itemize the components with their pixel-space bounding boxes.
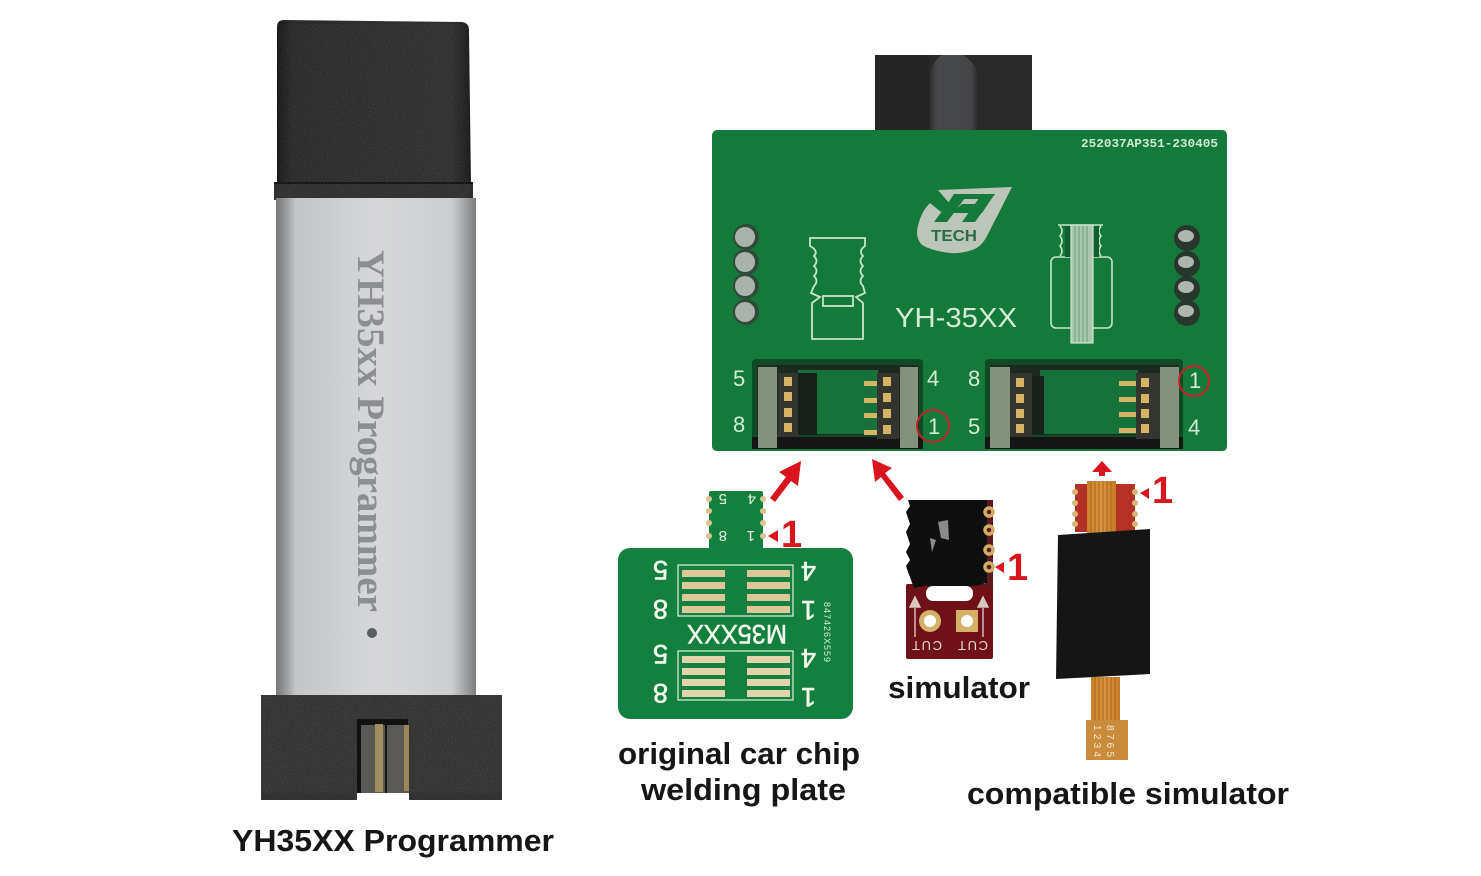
plate pin numbers and part name: 1 <box>801 595 816 625</box>
simulator red board: CUT <box>958 638 988 653</box>
pin 1 callout: welding plate <box>768 514 802 556</box>
flexible cable end pad: 8765 <box>1104 725 1115 757</box>
flexible cable end pad: 1234 <box>1091 725 1102 757</box>
panel: YH35XX programmer device <box>261 20 502 800</box>
simulator red board: CUT <box>912 638 942 653</box>
plate pin numbers and part name <box>653 555 832 712</box>
socket pin numbers: 8 <box>968 366 980 391</box>
plate tab: 5 <box>719 490 727 507</box>
panel: welding plate <box>618 490 853 719</box>
plate tab: 4 <box>748 490 756 507</box>
flexible cable upper <box>1087 481 1116 533</box>
PCB body <box>712 130 1227 451</box>
right chip socket <box>985 359 1183 449</box>
socket pin numbers <box>733 366 1201 440</box>
arrow: welding plate to left socket <box>770 461 801 502</box>
panel: compatible simulator <box>1056 481 1150 760</box>
plate tab <box>706 490 766 551</box>
plate pin numbers and part name: M35XXX <box>687 619 787 649</box>
socket pin numbers: 5 <box>968 414 980 439</box>
arrow: compatible simulator to right socket <box>1092 461 1112 476</box>
panel: simulator <box>906 500 993 659</box>
board model text: YH-35XX <box>895 302 1017 333</box>
plate tab: 8 <box>719 527 727 544</box>
socket pin numbers: 1 <box>1189 368 1201 393</box>
simulator red board <box>906 584 993 659</box>
programmer aluminium body <box>276 198 476 695</box>
device lettering: YH35xx Programmer <box>349 250 392 612</box>
socket pin numbers: 5 <box>733 366 745 391</box>
pin 1 callout: compatible simulator <box>1140 470 1173 512</box>
label: original car chip welding plate <box>618 736 860 807</box>
right header solder pads <box>1174 225 1200 326</box>
pin 1 callout: simulator: 1 <box>1007 547 1028 589</box>
left chip socket <box>752 359 923 449</box>
pin 1 marker, right socket <box>1179 366 1209 396</box>
board top connector <box>875 55 1032 131</box>
plate pin numbers and part name: 8 <box>653 678 668 708</box>
status LED dot <box>367 628 377 638</box>
programmer black end cap <box>274 20 473 200</box>
panel: green adapter board <box>712 55 1227 451</box>
programmer black base connector <box>261 695 502 800</box>
label: YH35XX Programmer: YH35XX Programmer <box>232 823 554 858</box>
plate pin numbers and part name: 4 <box>801 643 816 673</box>
end cap texture <box>279 24 469 198</box>
plate pin numbers and part name: 8 <box>653 594 668 624</box>
socket pin numbers: 1 <box>928 414 940 439</box>
arrow: simulator to left socket <box>872 459 904 501</box>
label: simulator: simulator <box>888 670 1030 705</box>
plate tab: 1 <box>747 527 755 544</box>
left header solder pads <box>733 224 759 325</box>
label: original car chip welding plate: original car chip <box>618 736 860 771</box>
silkscreen: module outline right <box>1051 225 1112 343</box>
compatible simulator red board <box>1072 484 1138 532</box>
label: compatible simulator: compatible simulator <box>967 776 1289 811</box>
pin 1 callout: welding plate: 1 <box>781 514 802 556</box>
board serial number: 252037AP351-230405 <box>1081 138 1218 151</box>
plate pin numbers and part name: 847426X559 <box>822 602 832 662</box>
YH7 TECH logo <box>917 187 1012 253</box>
simulator black epoxy top <box>906 500 993 588</box>
plate pin numbers and part name: 5 <box>653 639 668 669</box>
plate body <box>618 548 853 719</box>
plate pin numbers and part name: 5 <box>653 555 668 585</box>
socket pin numbers: 8 <box>733 412 745 437</box>
plate pin numbers and part name: 4 <box>801 556 816 586</box>
flexible cable lower <box>1091 677 1120 723</box>
pin 1 marker, left socket <box>917 410 949 442</box>
black sleeve <box>1056 529 1150 679</box>
socket pin numbers: 4 <box>1188 415 1200 440</box>
silkscreen: module outline left <box>810 238 865 339</box>
YH7 TECH logo: TECH <box>931 228 977 245</box>
upper pad block <box>678 565 793 616</box>
pin 1 callout: simulator <box>995 547 1028 589</box>
flexible cable end pad <box>1086 720 1128 760</box>
plate pin numbers and part name: 1 <box>801 682 816 712</box>
socket pin numbers: 4 <box>927 366 939 391</box>
pin 1 callout: compatible simulator: 1 <box>1152 470 1173 512</box>
label: original car chip welding plate: welding plate <box>640 772 846 807</box>
lower pad block <box>678 651 793 700</box>
